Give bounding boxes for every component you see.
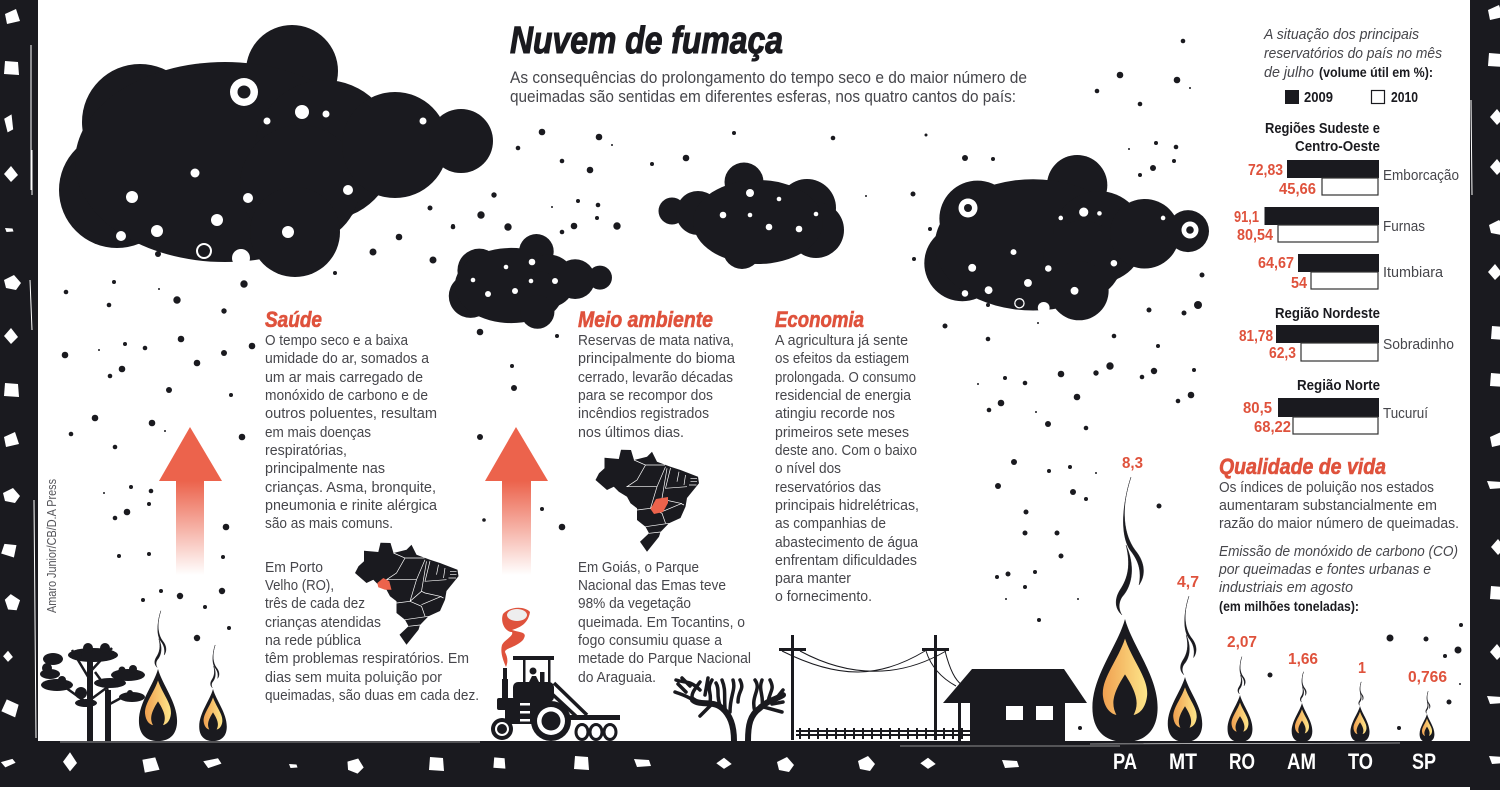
text: Saúde: pneumonia e rinite alérgica	[265, 497, 438, 514]
text: Meio ambiente: para se recompor dos	[578, 387, 713, 404]
legend intro: reservoirs: (volume útil em %):	[1319, 64, 1433, 80]
text: Economia: deste ano. Com o baixo	[775, 442, 917, 459]
text: CO emission chart caption	[1218, 543, 1458, 614]
text: Economia: reservatórios das	[775, 479, 881, 496]
text: Economia: residencial de energia	[775, 387, 912, 404]
bars: Emborcação: 45,66	[1279, 181, 1316, 198]
text: Saúde: um ar mais carregado de	[265, 369, 423, 386]
bars: Sobradinho: 81,78	[1239, 328, 1273, 345]
text: Goiás and Tocantins: do Araguaia.	[578, 669, 656, 686]
text: Goiás and Tocantins: metade do Parque Nacional	[578, 650, 751, 667]
bars: Itumbiara: 54	[1291, 275, 1307, 292]
bars: Itumbiara: 64,67	[1258, 255, 1294, 272]
icon: fence	[796, 728, 970, 739]
text: Porto Velho: na rede pública	[265, 632, 362, 649]
text: Saúde: monóxido de carbono e de	[265, 387, 428, 404]
text: Meio ambiente: Reservas de mata nativa,	[578, 332, 734, 349]
heading: Qualidade de vida: Qualidade de vida	[1219, 454, 1386, 479]
icon: house	[943, 669, 1087, 741]
legend intro: reservoirs: A situação dos principais	[1263, 26, 1419, 43]
bars: Furnas: 91,1	[1234, 209, 1259, 226]
text: Goiás and Tocantins: Em Goiás, o Parque	[578, 559, 699, 576]
text: Goiás and Tocantins: 98% da vegetação	[578, 595, 691, 612]
text: Meio ambiente: incêndios registrados	[578, 405, 709, 422]
text: Economia: primeiros sete meses	[775, 424, 909, 441]
intro text: As consequências do prolongamento do tempo seco e do maior número de	[510, 68, 1027, 87]
text: Goiás and Tocantins: queimada. Em Tocantins, o	[578, 614, 745, 631]
text: Saúde: em mais doenças	[265, 424, 371, 441]
flame chart: PA: PA	[1113, 749, 1137, 774]
heading: Região Norte: Região Norte	[1297, 378, 1380, 394]
text: Saúde: O tempo seco e a baixa	[265, 332, 409, 349]
flame chart: TO	[1348, 660, 1373, 774]
text: Saúde	[265, 332, 438, 532]
bars: Emborcação: Emborcação	[1383, 167, 1459, 184]
flame chart: PA	[1092, 455, 1158, 774]
text: Meio ambiente	[578, 332, 736, 441]
text: CO emission chart caption: por queimadas e fontes urbanas e	[1218, 561, 1431, 578]
heading: Sudeste e Centro-Oeste	[1265, 121, 1380, 155]
legend intro: reservoirs: de julho	[1264, 64, 1314, 81]
text: Meio ambiente: principalmente do bioma	[578, 350, 736, 367]
map: Brazil with Rondônia highlighted	[355, 543, 458, 645]
flame chart: PA: 8,3	[1122, 455, 1143, 472]
text: Economia: abastecimento de água	[775, 534, 919, 551]
flame chart: AM: AM	[1287, 749, 1316, 774]
heading: Meio ambiente: Meio ambiente	[578, 307, 713, 332]
legend intro: reservoirs	[1263, 26, 1442, 81]
arrow: centre	[485, 427, 548, 575]
icon: araucaria trees	[40, 643, 145, 741]
heading: Sudeste e Centro-Oeste: Centro-Oeste	[1295, 139, 1380, 155]
intro text: queimadas são sentidas em diferentes esferas, nos quatro cantos do país:	[510, 87, 1016, 106]
text: Porto Velho: três de cada dez	[265, 595, 365, 612]
text: Qualidade de vida: razão do maior número de queimadas.	[1219, 515, 1459, 532]
icon: bare cerrado tree	[675, 678, 783, 741]
cloud: right	[924, 155, 1209, 320]
text: Economia: o fornecimento.	[775, 588, 872, 605]
bars: Itumbiara: Itumbiara	[1383, 264, 1444, 281]
map: Brazil with Goiás highlighted	[596, 450, 699, 552]
heading: Economia: Economia	[775, 307, 864, 332]
text: Porto Velho: Velho (RO),	[265, 577, 334, 594]
text: Goiás and Tocantins: Nacional das Emas teve	[578, 577, 726, 594]
bars: Itumbiara	[1258, 254, 1444, 292]
cloud: small centre	[449, 234, 612, 329]
bars: Tucuruí: 80,5	[1243, 400, 1272, 417]
flame chart: SP: SP	[1412, 749, 1436, 774]
bar chart: reservoirs	[1234, 121, 1459, 436]
bars: Emborcação	[1248, 160, 1459, 198]
text: Saúde: crianças. Asma, bronquite,	[265, 479, 436, 496]
arrow: left	[159, 427, 222, 575]
flame chart: MT: 4,7	[1177, 574, 1199, 591]
text: Porto Velho: crianças atendidas	[265, 614, 381, 631]
bars: Tucuruí: 68,22	[1254, 419, 1291, 436]
text: Porto Velho: Em Porto	[265, 559, 323, 576]
flame chart: MT: MT	[1169, 749, 1197, 774]
bars: Furnas: 80,54	[1237, 227, 1273, 244]
text: Economia	[775, 332, 919, 605]
bars: Emborcação: 72,83	[1248, 162, 1283, 179]
flame chart: RO	[1227, 634, 1257, 774]
text: Economia: A agricultura já sente	[775, 332, 908, 349]
text: Saúde: outros poluentes, resultam	[265, 405, 437, 422]
text: Economia: atingiu recorde nos	[775, 405, 895, 422]
flame chart: TO: TO	[1348, 749, 1373, 774]
bars: Sobradinho: 62,3	[1269, 345, 1296, 362]
photo credit: Amaro Junior/CB/D.A Press	[45, 479, 59, 613]
text: Qualidade de vida: aumentaram substancialmente em	[1219, 497, 1437, 514]
bars: Sobradinho: Sobradinho	[1383, 336, 1454, 353]
flame chart: SP: 0,766	[1408, 669, 1447, 686]
bars: Tucuruí	[1243, 398, 1429, 436]
heading: Saúde: Saúde	[265, 307, 322, 332]
text: Economia: para manter	[775, 570, 851, 587]
text: CO emission chart caption: industriais em agosto	[1219, 579, 1353, 596]
flame chart: RO: RO	[1229, 749, 1255, 774]
intro text	[510, 68, 1027, 106]
bars: Tucuruí: Tucuruí	[1383, 405, 1429, 422]
text: Porto Velho: queimadas, são duas em cada dez.	[265, 687, 479, 704]
text: Saúde: principalmente nas	[265, 460, 385, 477]
bars: Furnas: Furnas	[1383, 218, 1425, 235]
text: Economia: os efeitos da estiagem	[775, 350, 909, 367]
bars: Sobradinho	[1239, 325, 1454, 362]
title: Nuvem de fumaça	[510, 20, 783, 62]
text: Porto Velho	[265, 559, 479, 704]
flame chart: TO: 1	[1358, 660, 1366, 677]
text: Saúde: respiratórias,	[265, 442, 347, 459]
flame chart: AM	[1287, 651, 1318, 774]
text: Economia: enfrentam dificuldades	[775, 552, 917, 569]
legend intro: reservoirs: reservatórios do país no mês	[1264, 45, 1442, 62]
legend: 2009 and 2010: 2009	[1304, 90, 1333, 106]
text: Meio ambiente: nos últimos dias.	[578, 424, 684, 441]
text: Goiás and Tocantins	[578, 559, 751, 686]
text: Economia: prolongada. O consumo	[775, 369, 916, 386]
text: CO emission chart caption: Emissão de monóxido de carbono (CO)	[1219, 543, 1458, 560]
text: Economia: as companhias de	[775, 515, 886, 532]
heading: Região Nordeste: Região Nordeste	[1275, 306, 1380, 322]
text: Saúde: são as mais comuns.	[265, 515, 393, 532]
text: Saúde: umidade do ar, somados a	[265, 350, 430, 367]
text: Economia: o nível dos	[775, 460, 841, 477]
legend: 2009 and 2010: 2010	[1391, 90, 1418, 106]
bars: Furnas	[1234, 207, 1425, 244]
flame chart: AM: 1,66	[1288, 651, 1318, 668]
text: Goiás and Tocantins: fogo consumiu quase a	[578, 632, 723, 649]
text: Porto Velho: têm problemas respiratórios. Em	[265, 650, 469, 667]
icon: flames with smoke, left	[139, 611, 227, 741]
text: Qualidade de vida	[1219, 479, 1459, 532]
icon: utility poles and wires	[779, 635, 962, 740]
text: Porto Velho: dias sem muita poluição por	[265, 669, 442, 686]
text: Economia: principais hidrelétricas,	[775, 497, 919, 514]
text: CO emission chart caption: (em milhões toneladas):	[1219, 598, 1359, 614]
text: Meio ambiente: cerrado, levarão décadas	[578, 369, 733, 386]
flame chart: SP	[1408, 669, 1447, 774]
cloud: upper centre	[658, 162, 844, 269]
flame chart: MT	[1168, 574, 1202, 774]
icon: tractor	[491, 608, 620, 741]
flame chart: RO: 2,07	[1227, 634, 1257, 651]
text: Qualidade de vida: Os índices de poluição nos estados	[1219, 479, 1434, 496]
legend: 2009 and 2010	[1285, 90, 1418, 106]
cloud: large left	[59, 25, 493, 277]
heading: Sudeste e Centro-Oeste: Regiões Sudeste e	[1265, 121, 1380, 137]
